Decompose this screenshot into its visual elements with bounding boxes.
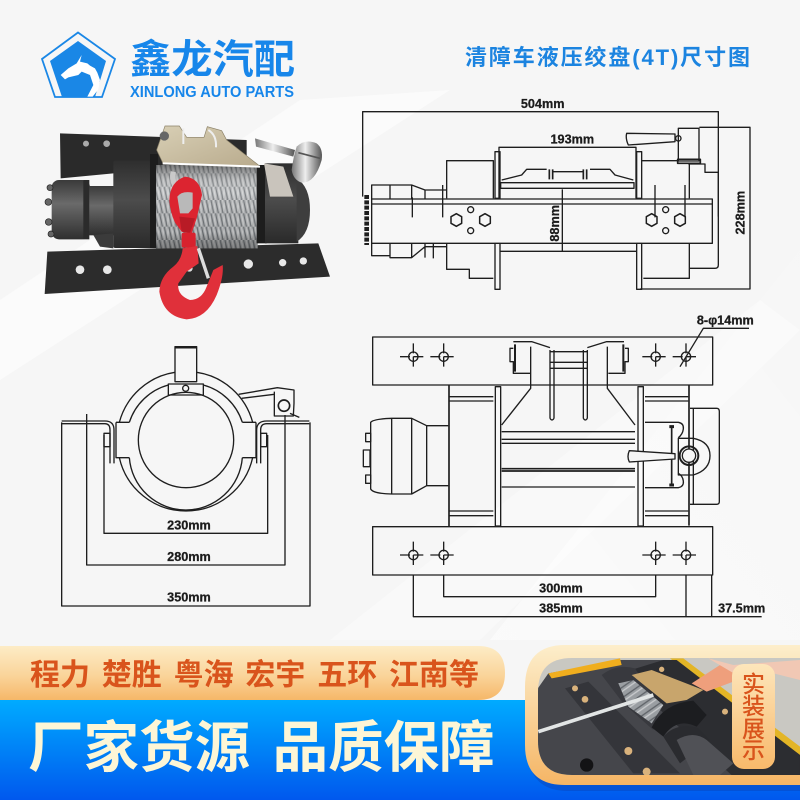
heading: product dimension title: 清障车液压绞盘(4T)尺寸图: [465, 45, 750, 70]
icon: pentagon dragon emblem: [42, 32, 115, 97]
overall width dimension lines: [363, 112, 718, 217]
end view outline: [62, 347, 309, 511]
installation photo frame: [525, 645, 800, 791]
upper mounting plate: [60, 133, 267, 178]
280mm label: 280mm: [167, 550, 211, 564]
dimension lines: [413, 575, 762, 617]
mounting plate with bolts: [367, 185, 712, 251]
hydraulic motor: [45, 180, 116, 248]
wire rope drum: [156, 165, 258, 248]
red hook: [159, 172, 223, 319]
bottom blue banner: [0, 700, 800, 800]
main slogan: 厂家货源 品质保障: [28, 703, 495, 783]
badge: installation label: 展: [742, 710, 765, 744]
logo English wordmark: XINLONG AUTO PARTS: [130, 84, 294, 101]
385mm label: 385mm: [539, 601, 583, 615]
diagram: end view with 230mm, 280mm, 350mm dimensions: [62, 347, 310, 606]
193mm label: 193mm: [551, 132, 594, 146]
rivets: [572, 667, 728, 776]
brand names: 程力 楚胜 粤海 宏宇 五环 江南等: [30, 650, 479, 694]
badge: installation label: 实: [742, 665, 765, 699]
right housing: [257, 163, 310, 243]
orange brand banner: [0, 646, 505, 700]
chrome handle: [255, 138, 322, 183]
228mm label: 228mm: [733, 191, 747, 234]
badge: installation label: [732, 664, 775, 769]
mounting hole crosshairs: [400, 343, 699, 568]
mounting plates: [373, 337, 713, 575]
300mm label: 300mm: [539, 581, 583, 595]
photo: hydraulic winch with red hook: [45, 126, 330, 319]
cable drum: [602, 667, 660, 730]
winch outline: [372, 128, 718, 289]
installation photo: [537, 657, 800, 777]
leader line for hole spec: [680, 328, 749, 367]
gold cover plate: [157, 126, 259, 167]
dimension lines: [62, 414, 310, 606]
winch body outline: [363, 342, 719, 527]
37.5mm label: 37.5mm: [718, 601, 765, 615]
8-φ14mm label: 8-φ14mm: [697, 313, 754, 327]
badge: installation label: 示: [742, 731, 765, 765]
350mm label: 350mm: [167, 591, 211, 605]
logo Chinese wordmark: 鑫龙汽配: [130, 27, 295, 85]
lower mounting plate: [45, 243, 330, 294]
badge: installation label: 装: [742, 687, 765, 721]
88mm label: 88mm: [548, 205, 562, 242]
logo: [42, 27, 295, 101]
diagram: top view with 504mm, 193mm, 88mm, 228mm dimensions: [363, 97, 750, 289]
diagram: plan view with 300mm, 385mm, 37.5mm and hole dimensions: [363, 313, 765, 617]
230mm label: 230mm: [167, 518, 211, 532]
504mm label: 504mm: [521, 97, 564, 111]
winch housing: [113, 154, 158, 248]
